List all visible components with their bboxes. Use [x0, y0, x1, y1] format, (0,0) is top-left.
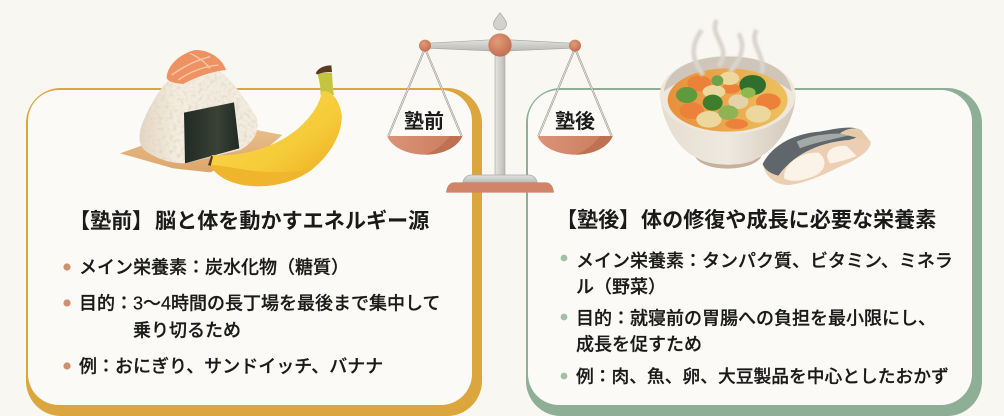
heading: before juku: 脳と体を動かすエネルギー源 — [155, 209, 429, 233]
bullet item: nutrient: ル（野菜） — [576, 277, 666, 297]
right pan — [538, 136, 613, 155]
beam — [425, 39, 575, 51]
bullet item: purpose — [561, 308, 936, 354]
icon: soup bowl and fish — [660, 20, 871, 185]
icon: rice ball — [140, 68, 258, 163]
icon: banana — [208, 65, 342, 186]
panel: before juku — [26, 88, 482, 416]
left pan — [387, 136, 462, 155]
soup — [668, 68, 788, 132]
icon: bowl foot — [695, 156, 762, 169]
icon: finial — [493, 13, 507, 30]
icon: paper sheet — [120, 129, 282, 172]
base dome — [463, 175, 537, 183]
label: left pan: 塾前 — [404, 110, 444, 133]
icon: onigiri and banana — [120, 50, 342, 186]
heading: after juku: 】 — [619, 209, 640, 232]
bullet item: purpose: 成長を促すため — [576, 334, 702, 354]
right strings — [538, 48, 612, 136]
left strings — [388, 48, 462, 136]
icon: balance scale — [387, 13, 613, 193]
list: after juku — [561, 251, 953, 386]
icon: salmon — [167, 50, 226, 84]
icon: fish — [763, 128, 871, 185]
icon: bowl rim — [660, 56, 796, 134]
bullet item: purpose: 目的：就寝前の胃腸への負担を最小限にし、 — [576, 308, 936, 328]
label: right pan: 塾後 — [555, 110, 595, 133]
carrots — [679, 75, 781, 129]
heading: after juku: 【 — [556, 209, 577, 232]
heading: after juku: 体の修復や成長に必要な栄養素 — [641, 208, 936, 232]
pole — [495, 55, 505, 176]
panel: after juku — [526, 88, 982, 416]
bullet item: purpose: 目的：3〜4時間の長丁場を最後まで集中して — [79, 294, 440, 314]
end pivots — [419, 40, 431, 52]
bullet item: examples: 例：おにぎり、サンドイッチ、バナナ — [79, 356, 383, 376]
bullet item: purpose: 乗り切るため — [133, 320, 241, 340]
bullet item: examples: 例：肉、魚、卵、大豆製品を中心としたおかず — [576, 366, 949, 386]
heading: before juku: 塾前 — [90, 209, 132, 233]
base plate — [446, 182, 554, 193]
heading: after juku: 塾後 — [577, 208, 619, 232]
list: before juku — [63, 258, 440, 376]
icon: nori — [184, 102, 239, 163]
heading: before juku: 【 — [69, 210, 90, 233]
steam — [694, 20, 763, 75]
bullet item: purpose — [63, 294, 440, 340]
bullet item: nutrient: メイン栄養素：タンパク質、ビタミン、ミネラ — [576, 251, 953, 271]
bullet item: nutrient: メイン栄養素：炭水化物（糖質） — [79, 258, 349, 278]
dumplings — [696, 72, 771, 128]
icon: bowl body — [660, 97, 796, 165]
heading: before juku: 】 — [132, 210, 153, 233]
broccoli — [676, 75, 766, 120]
center pivot — [488, 33, 512, 57]
bullet item: nutrient — [561, 251, 953, 297]
